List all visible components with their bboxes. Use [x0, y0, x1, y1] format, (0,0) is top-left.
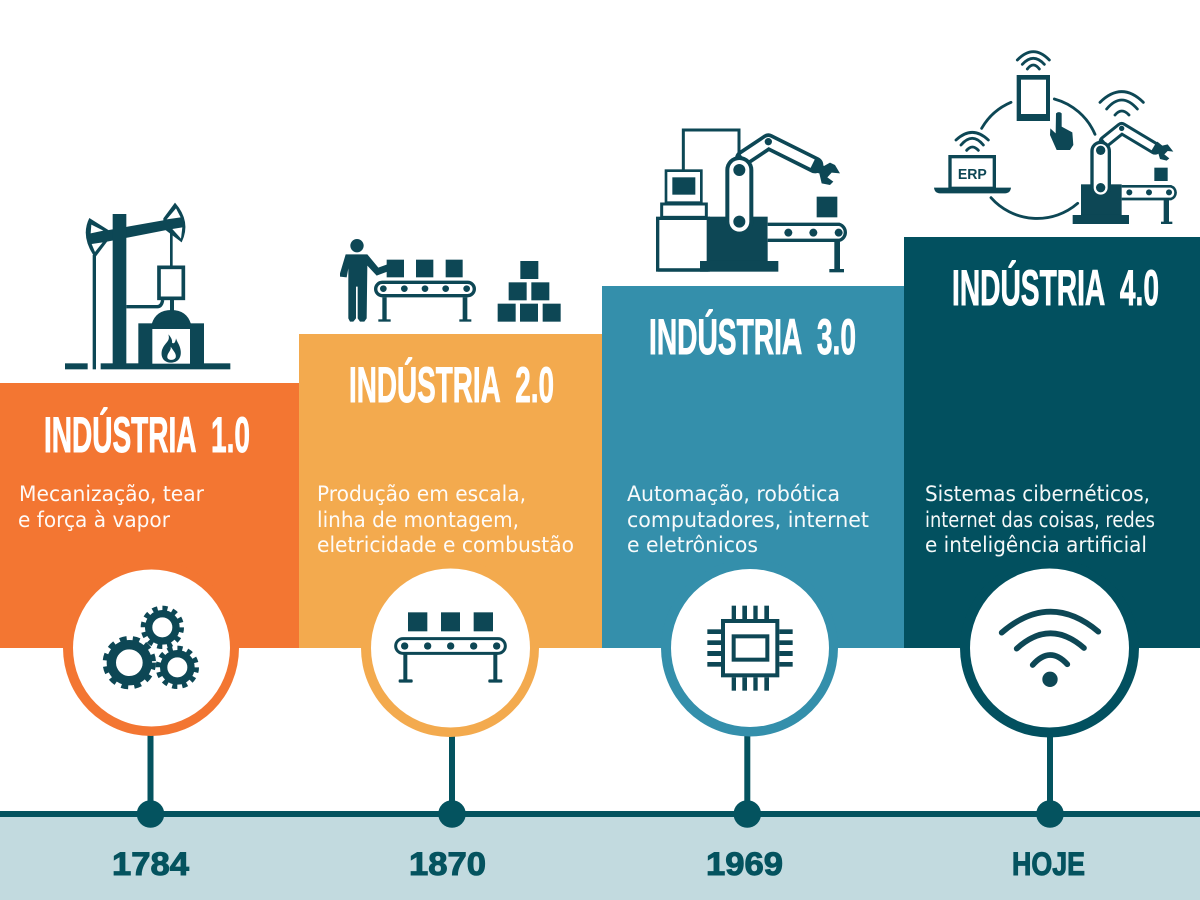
panel: Indústria 4.0 — [904, 237, 1200, 648]
text block: Indústria 4.0 description: Sistemas cibernéticos, — [925, 482, 1150, 507]
label: ERP: ERP — [958, 167, 987, 183]
year: Hoje: HOJE — [1012, 846, 1085, 882]
text block: Indústria 1.0 description — [18, 482, 204, 533]
timeline axis — [0, 730, 1200, 828]
badge: chip — [661, 560, 838, 736]
text block: Indústria 3.0 description — [627, 482, 869, 558]
icon: robot arm and computer — [658, 130, 845, 272]
icon: microchip — [707, 606, 793, 691]
panel: Indústria 3.0 — [602, 286, 904, 648]
text block: Indústria 1.0 description: e força à vapor — [18, 508, 170, 533]
text block: Indústria 2.0 description — [317, 482, 574, 558]
text block: Indústria 2.0 description: linha de montagem, — [317, 508, 519, 533]
timeline band — [0, 816, 1200, 900]
panel: Indústria 1.0 — [0, 383, 299, 648]
text block: Indústria 3.0 description: Automação, robótica — [627, 482, 840, 507]
icon: gears — [106, 609, 196, 686]
badge: gears — [63, 560, 239, 736]
icon: connected factory network — [934, 52, 1176, 224]
text block: Indústria 3.0 description: e eletrônicos — [627, 533, 758, 558]
text block: Indústria 3.0 description: computadores, internet — [627, 508, 869, 533]
badge: wifi — [960, 558, 1139, 738]
year: 1784: 1784 — [112, 846, 189, 882]
year: 1870: 1870 — [409, 846, 486, 882]
heading: Indústria 3.0: INDÚSTRIA 3.0 — [649, 309, 856, 365]
text block: Indústria 4.0 description: e inteligência artificial — [925, 533, 1147, 558]
heading: Indústria 2.0: INDÚSTRIA 2.0 — [349, 357, 554, 413]
year: 1969: 1969 — [706, 846, 783, 882]
text block: Indústria 1.0 description: Mecanização, tear — [19, 482, 204, 507]
icon: worker at assembly line — [340, 239, 561, 322]
icon: steam engine — [65, 203, 230, 369]
text block: Indústria 4.0 description — [925, 482, 1155, 558]
heading: Indústria 1.0: INDÚSTRIA 1.0 — [44, 407, 250, 463]
text block: Indústria 2.0 description: eletricidade e combustão — [317, 533, 574, 558]
icon: conveyor belt — [396, 612, 505, 683]
text block: Indústria 4.0 description: internet das coisas, redes — [925, 508, 1155, 533]
icon: wifi — [1002, 612, 1098, 687]
badge: conveyor — [361, 559, 539, 737]
text block: Indústria 2.0 description: Produção em escala, — [317, 482, 526, 507]
panel: Indústria 2.0 — [299, 334, 602, 648]
